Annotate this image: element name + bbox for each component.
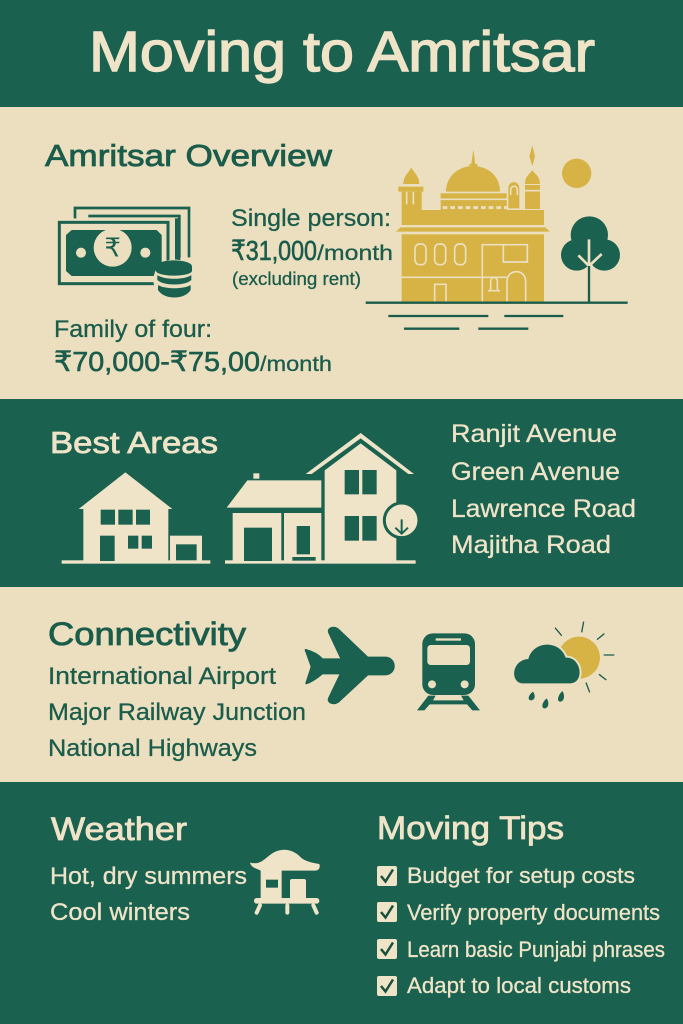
icon: large house	[225, 433, 419, 564]
heading: Best Areas: Best Areas	[50, 425, 218, 460]
text: family cost: ₹70,000-₹75,00	[54, 346, 260, 377]
text: family cost: /month	[260, 353, 332, 376]
check item: documents: Verify property documents	[407, 900, 660, 925]
heading: Amritsar Overview: Amritsar Overview	[45, 138, 333, 173]
list: transport links: International Airport	[48, 663, 276, 690]
icon: location badge	[384, 503, 419, 538]
icon: money and coins: ₹	[104, 233, 121, 263]
text: weather description: Hot, dry summers	[50, 863, 247, 890]
text: single person cost: /month	[317, 242, 393, 265]
list: area names	[451, 420, 636, 559]
panel: connectivity	[0, 587, 683, 782]
icon: small house	[62, 472, 210, 564]
icon: airplane	[306, 628, 394, 703]
heading: Connectivity: Connectivity	[48, 616, 246, 652]
list: area names: Lawrence Road	[451, 495, 636, 523]
panel: Amritsar overview	[0, 107, 683, 399]
list: area names: Ranjit Avenue	[451, 420, 617, 448]
panel: header	[0, 0, 683, 107]
text: family cost: Family of four:	[54, 316, 212, 343]
text: single person cost	[231, 205, 393, 289]
list: transport links	[48, 663, 306, 762]
check item: phrases: Learn basic Punjabi phrases	[407, 937, 665, 962]
heading: Weather: Weather	[51, 811, 187, 847]
text: family cost	[54, 316, 332, 377]
check item: customs: Adapt to local customs	[407, 973, 631, 998]
list: transport links: Major Railway Junction	[48, 699, 306, 726]
list: area names: Majitha Road	[451, 531, 611, 559]
text: weather description: Cool winters	[50, 899, 190, 926]
text: single person cost: ₹31,000	[231, 235, 317, 266]
icon: train	[417, 633, 480, 710]
icon: stilt hut	[250, 850, 320, 913]
icon: money and coins	[59, 208, 195, 301]
illustration: Golden Temple	[366, 145, 628, 329]
panel: best areas	[0, 399, 683, 587]
list: area names: Green Avenue	[451, 458, 620, 486]
text: single person cost: (excluding rent)	[232, 269, 361, 289]
icon: tree	[561, 216, 620, 303]
text: single person cost: Single person:	[231, 205, 391, 232]
check item: budget: Budget for setup costs	[407, 863, 635, 888]
list: transport links: National Highways	[48, 735, 257, 762]
text: weather description	[50, 863, 247, 926]
title: Moving to Amritsar	[89, 20, 595, 84]
heading: Moving Tips: Moving Tips	[377, 810, 564, 846]
checklist: moving tips	[377, 863, 665, 998]
icon: cloud, sun and rain	[514, 622, 614, 708]
panel: weather and tips	[0, 782, 683, 1024]
